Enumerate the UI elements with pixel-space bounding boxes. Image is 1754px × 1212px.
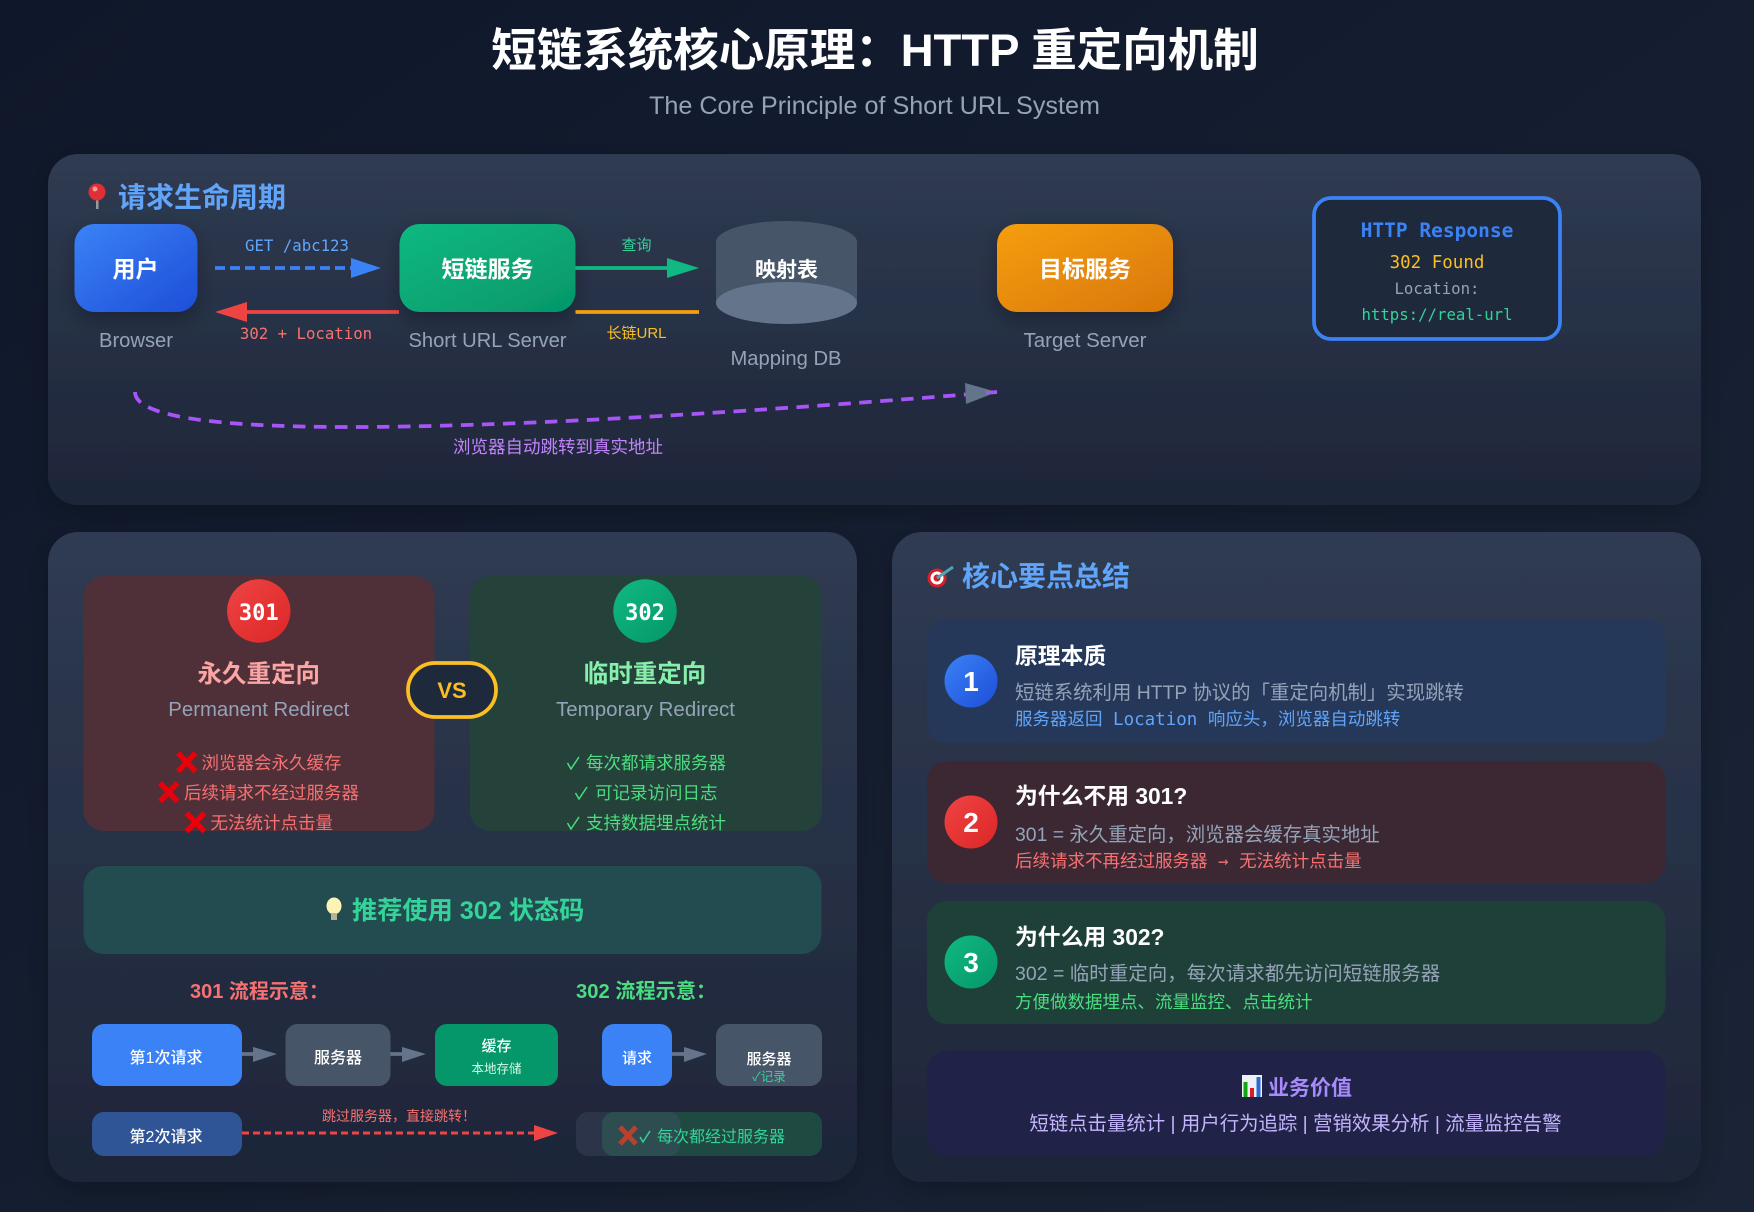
card: 302: 支持数据埋点统计: [586, 813, 726, 833]
arrow: query: 查询: [621, 237, 652, 254]
card 3: why 302: 3: [963, 947, 979, 978]
HTTP response box: Location:: [1394, 279, 1480, 298]
card 2: why not 301: [927, 761, 1666, 883]
arrow: GET request: [215, 236, 381, 278]
302 flow: 302 流程示意：: [576, 979, 716, 1003]
VS badge: VS: [437, 678, 467, 703]
arrow: long URL: [576, 312, 699, 342]
301 flow: 第1次请求: [130, 1049, 202, 1067]
card: 302: 每次都请求服务器: [586, 753, 726, 773]
card 3: why 302: 302 = 临时重定向，每次请求都先访问短链服务器: [1015, 963, 1440, 985]
card: 302: [470, 576, 822, 833]
arrow: browser auto redirect: [135, 383, 997, 457]
301 flow: 301 流程示意：: [190, 979, 329, 1003]
node: mapping DB cylinder: 映射表: [755, 259, 818, 282]
card 2: why not 301: 2: [963, 807, 979, 838]
302 flow: [576, 979, 822, 1156]
node: user: Browser: [99, 330, 173, 352]
HTTP response box: 302 Found: [1390, 253, 1484, 273]
VS badge: [408, 663, 496, 717]
node: user: [74, 224, 198, 352]
302 flow: 每次都经过服务器: [657, 1128, 785, 1146]
301 flow: 跳过服务器，直接跳转！: [322, 1108, 476, 1124]
card: 301: Permanent Redirect: [168, 699, 350, 721]
icon: chart: [1242, 1075, 1262, 1097]
card 2: why not 301: 301 = 永久重定向，浏览器会缓存真实地址: [1015, 824, 1380, 846]
arrow: long URL: 长链URL: [606, 325, 667, 342]
card: 302: 可记录访问日志: [595, 783, 718, 803]
icon: x marks: [160, 753, 204, 832]
card: 301: 浏览器会永久缓存: [202, 753, 342, 773]
panel: 301 vs 302: [48, 532, 857, 1182]
card 1: principle: 原理本质: [1015, 643, 1106, 669]
card 3: why 302: 方便做数据埋点、流量监控、点击统计: [1015, 993, 1312, 1013]
card 3: why 302: [927, 901, 1666, 1024]
node: target server: [997, 224, 1173, 352]
node: short URL server: [400, 224, 576, 352]
node: target server: 目标服务: [1039, 256, 1131, 282]
callout: recommend 302: 推荐使用 302 状态码: [352, 897, 584, 925]
302 flow: ✓记录: [752, 1070, 786, 1084]
301 flow: 第2次请求: [130, 1128, 202, 1146]
card: 302: 临时重定向: [584, 660, 706, 688]
node: mapping DB cylinder: Mapping DB: [730, 348, 842, 370]
icon: faded x: [620, 1127, 636, 1144]
arrow: 302 response: 302 + Location: [240, 324, 372, 343]
node: user: 用户: [112, 256, 158, 282]
title: 短链系统核心原理：HTTP 重定向机制: [491, 25, 1259, 76]
icon: pin: [88, 184, 106, 209]
arrow: browser auto redirect: 浏览器自动跳转到真实地址: [453, 437, 663, 457]
callout: recommend 302: [84, 866, 822, 954]
302 flow: 服务器: [746, 1051, 792, 1068]
arrow: query: [576, 237, 699, 278]
HTTP response box: https://real-url: [1361, 305, 1513, 324]
card: 301: 后续请求不经过服务器: [184, 783, 359, 803]
subtitle: The Core Principle of Short URL System: [649, 92, 1100, 120]
arrow: GET request: GET /abc123: [245, 236, 349, 255]
heading: key takeaways: 核心要点总结: [962, 561, 1130, 592]
301 flow: 本地存储: [471, 1061, 522, 1076]
301 flow: [92, 979, 558, 1156]
HTTP response box: [1314, 198, 1560, 339]
HTTP response box: HTTP Response: [1361, 219, 1513, 242]
card 1: principle: [927, 619, 1666, 743]
icon: target: [928, 567, 953, 588]
card 1: principle: 短链系统利用 HTTP 协议的「重定向机制」实现跳转: [1015, 682, 1464, 704]
card: 301: 301: [239, 601, 279, 626]
icon: bulb: [326, 898, 342, 920]
node: mapping DB cylinder: [716, 221, 857, 370]
card: 302: 302: [625, 601, 665, 626]
card: 301: [84, 576, 434, 833]
card: 301: 永久重定向: [198, 660, 320, 688]
heading: request lifecycle: 请求生命周期: [118, 181, 286, 213]
card: 302: Temporary Redirect: [556, 699, 735, 721]
302 flow: 请求: [622, 1050, 652, 1067]
node: short URL server: Short URL Server: [408, 330, 567, 352]
card 1: principle: 服务器返回 Location 响应头，浏览器自动跳转: [1015, 710, 1400, 730]
card 2: why not 301: 为什么不用 301?: [1015, 783, 1187, 809]
panel: key takeaways: [892, 532, 1701, 1182]
card: business value: [927, 1051, 1666, 1156]
card: 301: 无法统计点击量: [210, 813, 333, 833]
icon: check marks: [568, 757, 587, 829]
301 flow: 缓存: [481, 1038, 512, 1055]
card: business value: 业务价值: [1268, 1077, 1352, 1100]
node: short URL server: 短链服务: [442, 256, 534, 282]
node: target server: Target Server: [1024, 330, 1147, 352]
icon: check: [640, 1131, 650, 1142]
card: business value: 短链点击量统计 | 用户行为追踪 | 营销效果分析 | 流量监控告警: [1029, 1113, 1562, 1135]
card 3: why 302: 为什么用 302?: [1015, 924, 1164, 950]
arrow: 302 response: [215, 302, 399, 343]
panel: request lifecycle: [48, 154, 1701, 505]
card 1: principle: 1: [963, 666, 979, 697]
301 flow: 服务器: [314, 1049, 362, 1067]
card 2: why not 301: 后续请求不再经过服务器 → 无法统计点击量: [1015, 852, 1362, 872]
